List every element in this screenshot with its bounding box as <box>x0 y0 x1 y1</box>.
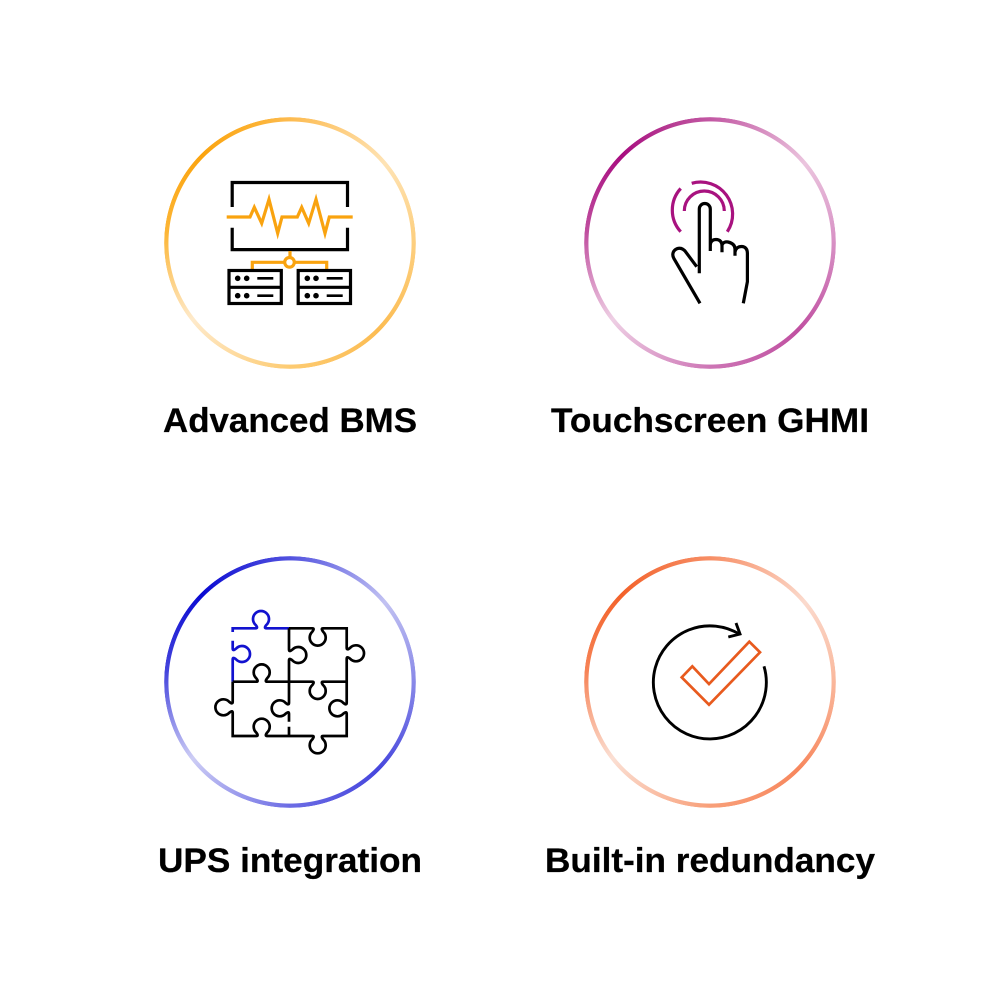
icon: puzzle pieces <box>214 610 366 755</box>
check mark <box>682 642 760 705</box>
connector <box>252 251 327 269</box>
ring: blue gradient <box>164 556 416 808</box>
hand outline <box>673 204 747 303</box>
black puzzle edges <box>215 628 364 753</box>
ring: orange gradient <box>164 117 416 369</box>
heading: Touchscreen GHMI <box>551 402 869 440</box>
ring: orange-red gradient <box>584 556 836 808</box>
circular arrow <box>653 623 766 739</box>
right server <box>298 270 350 304</box>
heading: UPS integration <box>158 842 422 880</box>
left server <box>229 270 281 304</box>
touch waves <box>672 182 733 232</box>
heading: Advanced BMS <box>163 402 417 440</box>
blue puzzle edges <box>233 611 289 682</box>
ring: magenta gradient <box>584 117 836 369</box>
heading: Built-in redundancy <box>545 842 875 880</box>
pulse line <box>227 199 353 233</box>
icon: check in circular arrow <box>652 622 768 740</box>
panel: Built-in redundancy <box>545 556 875 880</box>
icon: touching hand <box>670 180 749 304</box>
icon: monitor with servers <box>226 180 353 306</box>
monitor frame <box>232 182 348 250</box>
panel: UPS integration <box>158 556 422 880</box>
panel: Touchscreen GHMI <box>551 117 869 440</box>
panel: Advanced BMS <box>163 117 417 440</box>
